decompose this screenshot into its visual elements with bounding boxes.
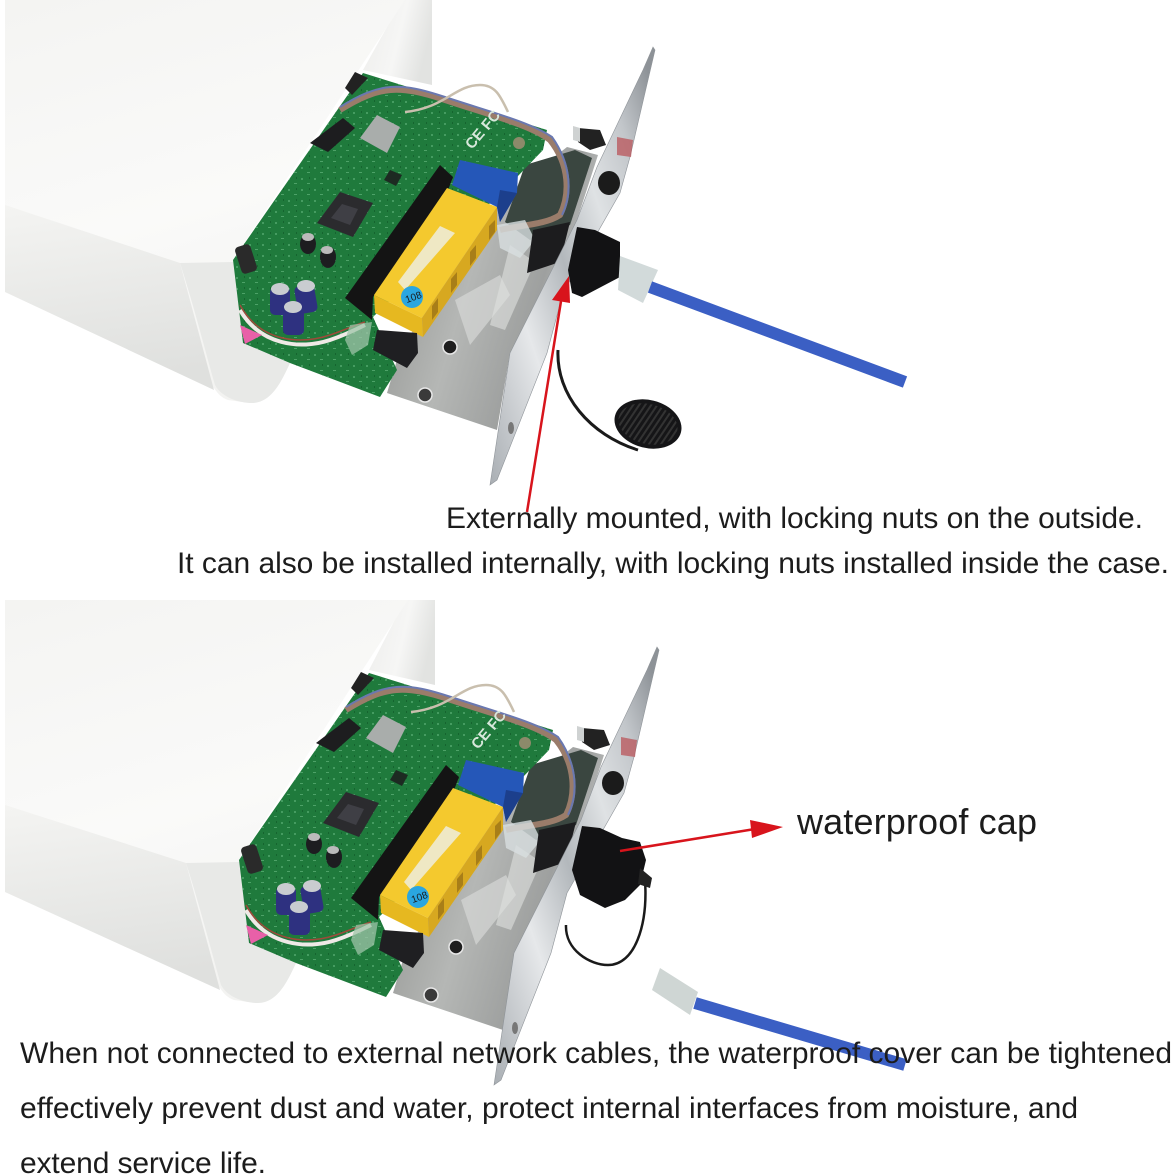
circuit board xyxy=(233,72,598,430)
blue network cable xyxy=(695,1003,905,1065)
locking nut and connector xyxy=(568,227,620,297)
enclosure xyxy=(5,0,432,403)
caption: waterproof cover benefits xyxy=(20,1037,1172,1176)
mounting plate xyxy=(494,647,659,1085)
circuit board xyxy=(239,672,604,1030)
waterproof cap xyxy=(609,392,687,456)
retaining cord xyxy=(558,350,638,450)
label: waterproof cap: waterproof cap xyxy=(796,801,1037,842)
threaded rear of connector xyxy=(527,222,570,273)
plug xyxy=(618,256,658,303)
threaded rear of connector xyxy=(533,822,576,873)
blue network cable xyxy=(650,287,905,382)
locking nut and fitted waterproof cap xyxy=(572,826,652,908)
arrow: points to locking nut xyxy=(527,276,570,512)
caption: external mounting xyxy=(177,502,1169,580)
caption: external mounting: It can also be installed internally, with locking nuts installed inside the case. xyxy=(177,547,1169,580)
photo: bottom device with waterproof cap fitted xyxy=(5,600,905,1085)
caption: external mounting: Externally mounted, with locking nuts on the outside. xyxy=(446,502,1143,535)
photo: top device with externally mounted connector xyxy=(5,0,905,485)
arrow: points to waterproof cap xyxy=(620,820,783,851)
caption: waterproof cover benefits: When not connected to external network cables, the waterproof cover can be tightened xyxy=(20,1037,1172,1070)
caption: waterproof cover benefits: effectively prevent dust and water, protect internal interfaces from moisture, and xyxy=(20,1092,1078,1125)
retaining cord xyxy=(566,880,645,965)
mounting plate xyxy=(490,47,655,485)
loose plug xyxy=(652,968,698,1015)
enclosure xyxy=(5,600,435,1003)
